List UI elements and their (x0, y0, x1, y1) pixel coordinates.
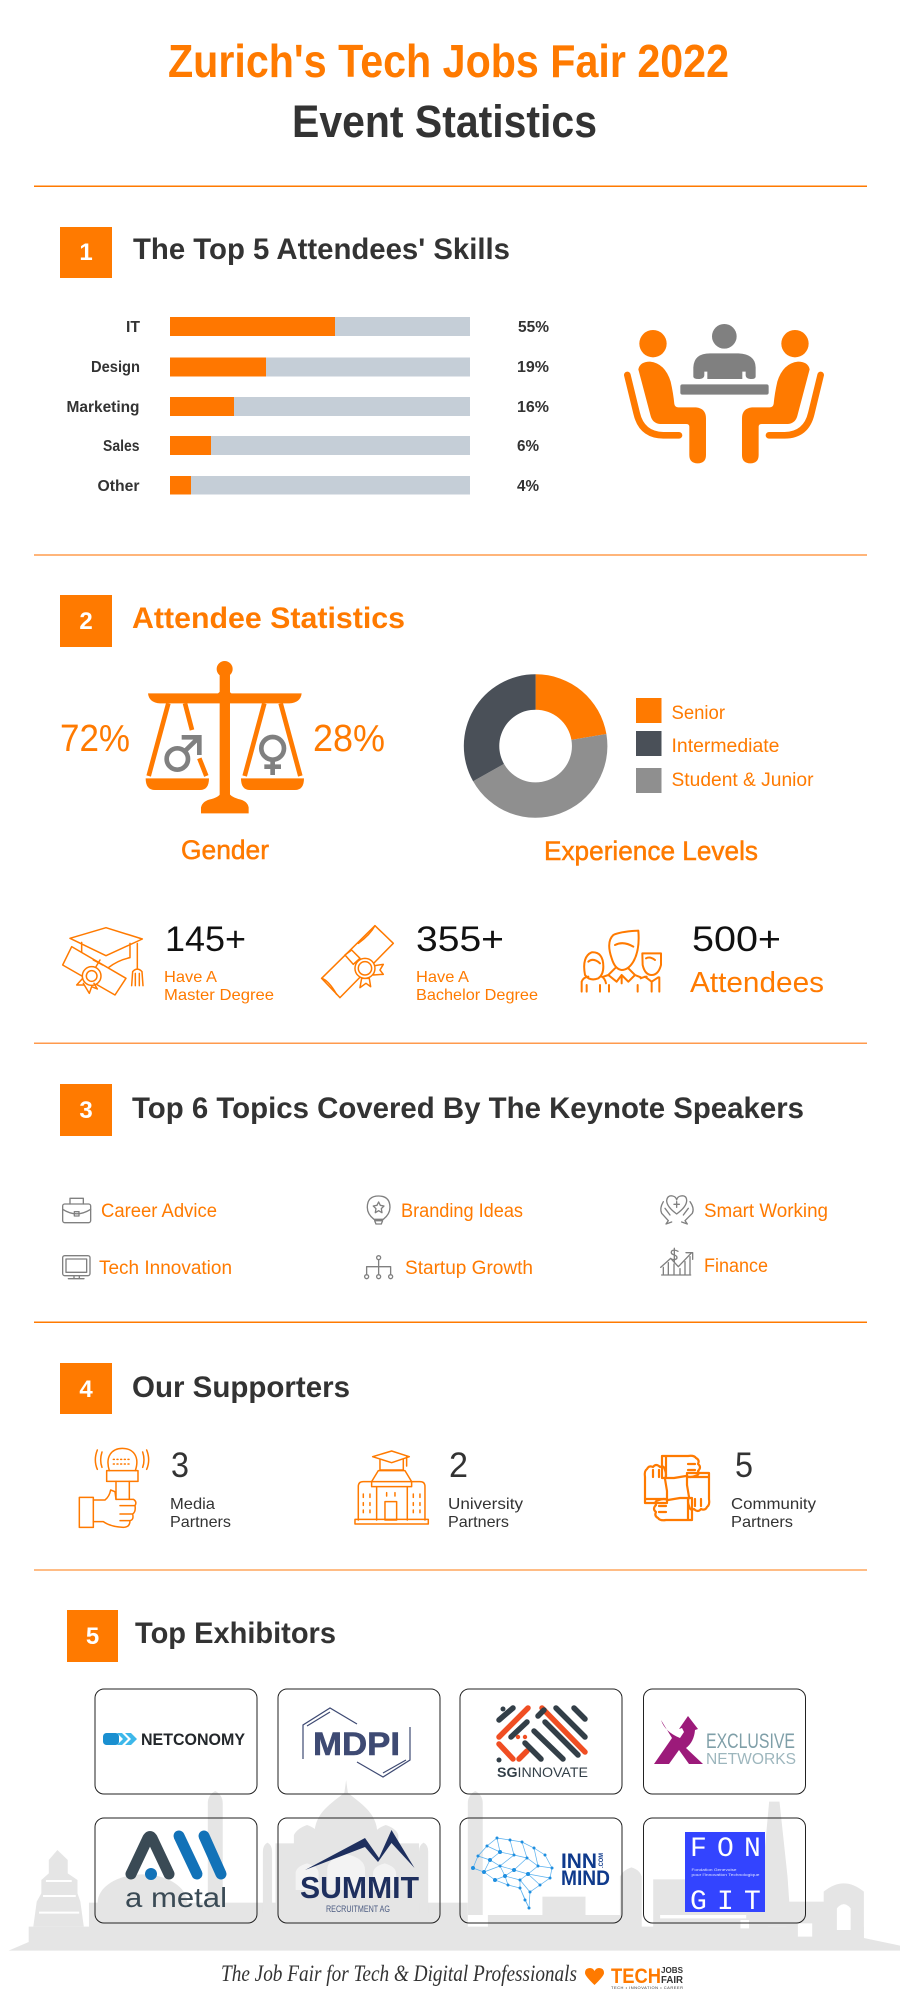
logo card: SGInnovate (460, 1689, 622, 1794)
stat: 355 bachelor: Bachelor Degree (416, 987, 538, 1004)
stat: community partners: Partners (731, 1514, 793, 1531)
bar chart: 16% (517, 399, 549, 416)
stat: 500 attendees: Attendees (690, 967, 824, 999)
icon: microphone in hand (79, 1448, 149, 1527)
footer logo: Tech Jobs Fair: JOBS (661, 1966, 684, 1975)
stat: media partners (170, 1446, 231, 1531)
stat: university partners: University (448, 1496, 523, 1513)
heading: Attendee Statistics (132, 602, 405, 635)
gender female percent: 28% (313, 718, 385, 760)
stat: 355 bachelor (416, 920, 538, 1004)
icon: heart (585, 1968, 604, 1985)
bar chart: 6% (517, 438, 539, 455)
number badge 4 (60, 1363, 112, 1414)
bar chart: IT (126, 319, 141, 336)
title line 2: Event Statistics (292, 96, 597, 147)
logo card: InnoMind: .COM (599, 1853, 605, 1868)
number badge 5: 5 (86, 1623, 99, 1650)
number badge 4: 4 (79, 1376, 93, 1403)
bar chart: 19% (517, 359, 549, 376)
number badge 2: 2 (79, 608, 93, 635)
icon: university (355, 1451, 428, 1524)
stat: community partners: Community (731, 1496, 816, 1513)
heading: Top Exhibitors (135, 1617, 336, 1650)
icon: briefcase (63, 1198, 91, 1223)
topic: tech innovation: Tech Innovation (99, 1258, 232, 1279)
stat: 500 attendees (690, 920, 824, 999)
topic: startup growth: Startup Growth (405, 1258, 533, 1279)
logo card: Netconomy (95, 1689, 257, 1794)
icon: finance chart (661, 1248, 693, 1275)
stat: media partners: Media (170, 1496, 215, 1513)
logo card: FonGit: GIT (690, 1887, 761, 1918)
footer logo: Tech Jobs Fair: TECH • INNOVATION • CAREER (611, 1985, 683, 1990)
legend (636, 698, 814, 793)
legend: Senior (672, 703, 726, 724)
logo card: MDPI (278, 1689, 440, 1794)
logo card: SGInnovate: SGINNOVATE (497, 1764, 588, 1780)
number badge 2 (60, 595, 112, 647)
topic: career advice: Career Advice (101, 1201, 217, 1222)
stat: university partners: Partners (448, 1514, 509, 1531)
icon: joined hands (645, 1456, 709, 1520)
logo card: Exclusive Networks: EXCLUSIVE (706, 1730, 795, 1753)
heading: Top 6 Topics Covered By The Keynote Speakers (132, 1092, 804, 1125)
topic: finance: Finance (704, 1256, 768, 1277)
icon: graduation cap and diploma (63, 928, 143, 995)
bar chart: Design (91, 359, 140, 376)
stat: 145 master (164, 920, 274, 1004)
logo card: a metal (95, 1818, 257, 1923)
icon: monitor (63, 1256, 90, 1279)
stat: 145 master: 145+ (165, 920, 246, 959)
skyline background (9, 1780, 900, 1951)
logo card: InnoMind: MIND (561, 1867, 610, 1890)
footer logo: Tech Jobs Fair: TECH (611, 1965, 661, 1988)
icon: lightbulb (367, 1196, 390, 1224)
icon: meeting table (627, 324, 821, 463)
panel: supporters (60, 1363, 816, 1531)
icon: attendees group (582, 931, 661, 992)
number badge 1: 1 (79, 239, 93, 266)
heading: Our Supporters (132, 1371, 350, 1404)
logo card: Exclusive Networks (644, 1689, 806, 1794)
title (168, 35, 729, 147)
topic: smart working: Smart Working (704, 1201, 828, 1222)
panel: keynote topics (60, 1084, 828, 1279)
logo card: InnoMind: INN (561, 1850, 597, 1873)
stat: 355 bachelor: 355+ (416, 920, 504, 959)
stat: 145 master: Have A (164, 969, 217, 986)
stat: 145 master: Master Degree (164, 987, 274, 1004)
stat: community partners (731, 1446, 816, 1531)
logo card: InnoMind (460, 1818, 622, 1923)
stat: university partners: 2 (449, 1446, 468, 1485)
gender male percent: 72% (60, 718, 130, 760)
bar chart (66, 317, 549, 495)
number badge 1 (60, 227, 112, 278)
icon: gender scale (146, 661, 304, 813)
bar chart: Marketing (66, 399, 140, 416)
bar chart: 55% (518, 319, 549, 336)
gender label: Gender (181, 835, 269, 865)
stat: 500 attendees: 500+ (692, 920, 781, 959)
logo card: Summit (278, 1818, 440, 1923)
panel: top 5 skills (60, 227, 821, 495)
logo card: a metal: a metal (125, 1882, 227, 1913)
logo card: Exclusive Networks: NETWORKS (706, 1751, 796, 1768)
logo card: FonGit: Fondation Genevoise (692, 1867, 737, 1872)
logo card: Netconomy: NETCONOMY (141, 1730, 246, 1749)
donut chart (464, 674, 607, 818)
title line 1: Zurich's Tech Jobs Fair 2022 (168, 35, 729, 87)
number badge 3 (60, 1084, 112, 1136)
legend: Intermediate (672, 736, 780, 757)
icon: org chart (365, 1256, 393, 1279)
footer logo: Tech Jobs Fair: FAIR (661, 1975, 684, 1986)
logo card: FonGit: FON (690, 1834, 761, 1865)
panel: attendee statistics (60, 595, 824, 1004)
experience label: Experience Levels (544, 836, 758, 866)
number badge 5 (67, 1610, 118, 1662)
logo card: Summit: SUMMIT (300, 1870, 419, 1905)
logo card: FonGit (644, 1818, 806, 1923)
logo card: Summit: RECRUITMENT AG (326, 1904, 390, 1914)
icon: diploma (322, 926, 393, 998)
number badge 3: 3 (79, 1097, 93, 1124)
icon: hands and heart (661, 1196, 693, 1224)
topic: branding ideas: Branding Ideas (401, 1201, 523, 1222)
bar chart: Other (98, 478, 140, 495)
stat: media partners: Partners (170, 1514, 231, 1531)
logo card: FonGit: pour l'Innovation Technologique (692, 1872, 760, 1877)
stat: 355 bachelor: Have A (416, 969, 469, 986)
stat: community partners: 5 (735, 1446, 753, 1485)
bar chart: 4% (517, 478, 539, 495)
legend: Student & Junior (672, 770, 814, 791)
footer tagline: The Job Fair for Tech & Digital Professionals (221, 1961, 577, 1986)
stat: university partners (448, 1446, 523, 1531)
panel: top exhibitors (67, 1610, 806, 1923)
logo card: MDPI: MDPI (313, 1726, 400, 1762)
heading: The Top 5 Attendees' Skills (133, 233, 510, 266)
stat: media partners: 3 (171, 1446, 189, 1485)
bar chart: Sales (103, 438, 140, 455)
